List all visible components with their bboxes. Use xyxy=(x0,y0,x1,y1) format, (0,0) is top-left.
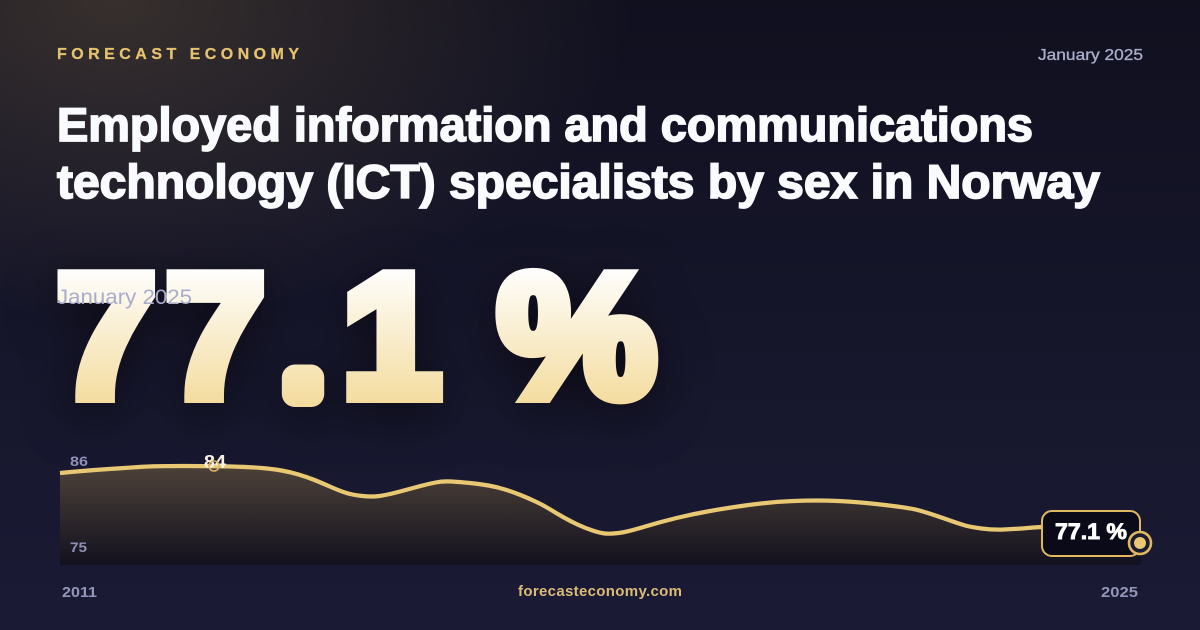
end year: 2025 xyxy=(1101,584,1138,601)
big value: 7 xyxy=(57,240,156,434)
area chart xyxy=(60,452,1151,565)
chart area fill xyxy=(60,466,1141,565)
date top right: January 2025 xyxy=(1038,47,1143,64)
big value: 7 xyxy=(166,240,265,434)
title xyxy=(57,98,1100,208)
big value xyxy=(57,240,656,434)
end marker xyxy=(1129,532,1151,554)
peak label: 84 xyxy=(204,452,226,472)
chart line xyxy=(60,466,1050,534)
value callout: 77.1 % xyxy=(1055,519,1127,544)
source url: forecasteconomy.com xyxy=(518,583,682,600)
big value: % xyxy=(498,240,656,434)
title: Employed information and communications xyxy=(57,98,1033,151)
brand label: FORECAST ECONOMY xyxy=(57,46,299,63)
start year: 2011 xyxy=(62,584,97,601)
peak marker xyxy=(209,461,219,471)
title: technology (ICT) specialists by sex in Norway xyxy=(57,155,1100,208)
axis min label: 75 xyxy=(70,539,87,555)
big value: . xyxy=(288,294,319,418)
big value: 1 xyxy=(342,240,441,434)
date overlay: January 2025 xyxy=(57,286,192,309)
value callout xyxy=(1042,511,1140,556)
axis max label: 86 xyxy=(70,453,88,469)
